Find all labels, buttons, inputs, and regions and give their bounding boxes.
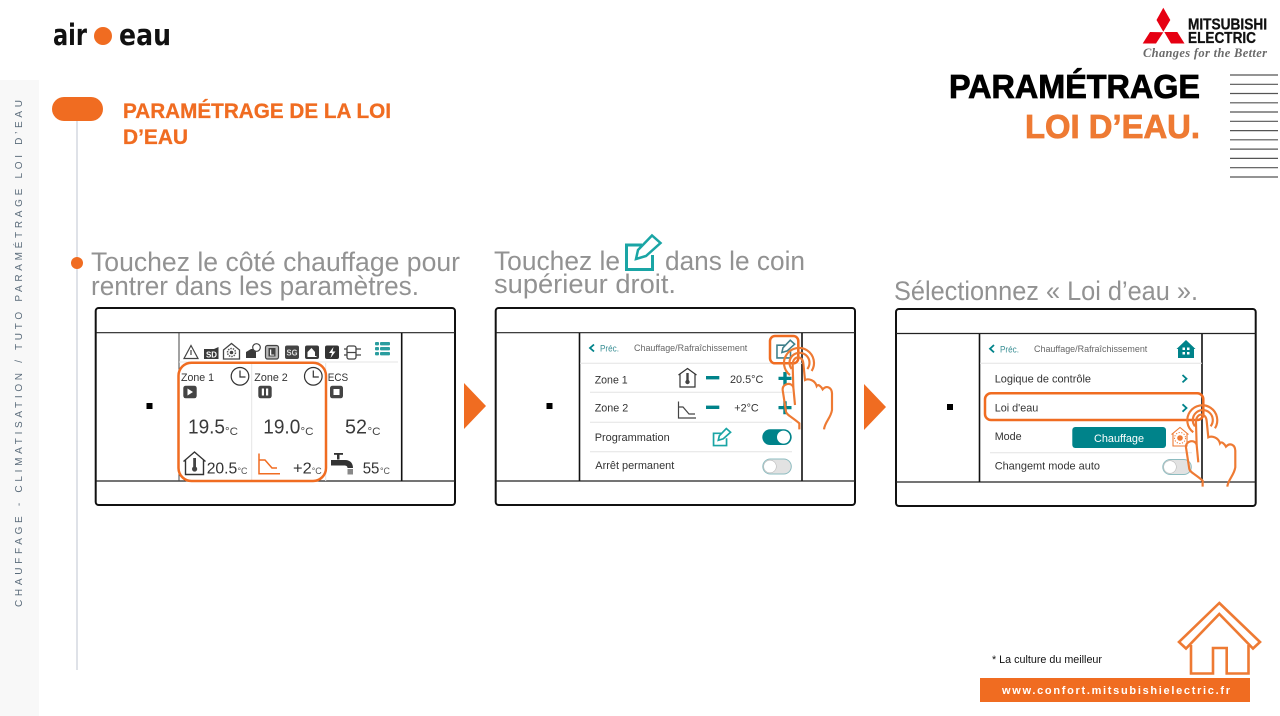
zone 2 column: 19.0 (263, 416, 300, 438)
zone 1 column: Zone 1 (181, 372, 214, 384)
row: loi d'eau: Loi d'eau (995, 403, 1038, 415)
logo: Mitsubishi Electric (1143, 8, 1267, 60)
zone 2 column: °C (300, 426, 314, 438)
status icons: SG (286, 348, 298, 358)
step 2 text: Touchez le (494, 246, 620, 276)
highlight: edit icon (770, 336, 798, 363)
timeline (52, 97, 103, 670)
panel: screen 1 home (96, 308, 455, 505)
icon: touch hand (1186, 405, 1235, 487)
step 2 text (494, 236, 805, 299)
ECS column: 52 (345, 416, 367, 438)
zone 1 column (181, 368, 249, 478)
status icons (184, 344, 361, 360)
row: arret permanent (595, 459, 791, 474)
ECS column: ECS (328, 372, 348, 384)
row: zone 1 (595, 368, 792, 387)
row: arret permanent: Arrêt permanent (595, 460, 674, 472)
header: Chauffage/Rafraîchissement (1034, 344, 1148, 355)
row: logique de controle: Logique de contrôle (995, 374, 1091, 386)
icon: edit (777, 340, 795, 358)
ECS column (328, 372, 390, 478)
section heading: D’EAU (123, 126, 188, 149)
row: mode: Mode (995, 431, 1022, 443)
header: Préc. (1000, 344, 1019, 354)
panel: screen 2 heating (496, 308, 855, 505)
row: logique de controle (995, 374, 1186, 386)
footnote: * La culture du meilleur (992, 654, 1102, 666)
zone 2 column (254, 368, 322, 478)
section heading (123, 100, 391, 149)
zone 2 column: +2 (293, 460, 312, 478)
zone 1 column: °C (238, 466, 248, 476)
zone 1 column: 20.5 (207, 460, 237, 478)
row: mode (995, 427, 1188, 448)
row: changement mode auto: Changemt mode auto (995, 460, 1100, 472)
sidebar (0, 80, 39, 716)
logo: Mitsubishi Electric: MITSUBISHI (1188, 17, 1267, 34)
row: changement mode auto (995, 460, 1191, 474)
row: zone 1: 20.5°C (730, 374, 763, 386)
header (990, 344, 1148, 355)
logo: air eau: eau (119, 18, 171, 52)
row: loi d'eau (995, 403, 1186, 415)
status icons: L (270, 348, 274, 358)
logo: air eau: air (53, 18, 88, 52)
row: zone 2: +2°C (734, 403, 759, 415)
footer url bar (980, 678, 1250, 702)
header: Chauffage/Rafraîchissement (634, 343, 748, 354)
row: zone 1: Zone 1 (595, 374, 628, 386)
icon: home (1176, 340, 1196, 358)
ECS column: °C (380, 466, 390, 476)
header: Préc. (600, 344, 619, 354)
title: PARAMÉTRAGE (949, 68, 1200, 105)
panel: screen 3 settings (896, 309, 1256, 506)
step 1 text: Touchez le côté chauffage pour (91, 247, 460, 277)
icon: touch hand (783, 348, 832, 429)
row: programmation (595, 429, 792, 446)
zone 1 column: °C (225, 426, 238, 438)
step 2 text: supérieur droit. (494, 269, 676, 299)
highlight: zones (178, 363, 326, 481)
sidebar: CHAUFFAGE - CLIMATISATION / TUTO PARAMÉTRAGE LOI D’EAU (12, 100, 25, 607)
logo: Mitsubishi Electric: ELECTRIC (1188, 30, 1256, 47)
row: programmation: Programmation (595, 432, 670, 444)
zone 2 column: Zone 2 (254, 372, 288, 384)
row: zone 2 (595, 401, 792, 418)
zone 2 column: °C (312, 466, 322, 476)
logo: air eau (53, 18, 171, 52)
footer url bar: www.confort.mitsubishielectric.fr (1001, 685, 1231, 697)
logo: Mitsubishi Electric: Changes for the Better (1143, 46, 1267, 60)
step 1 text: rentrer dans les paramètres. (91, 271, 419, 301)
header (590, 343, 748, 354)
ECS column: 55 (363, 460, 379, 478)
step 2 text: dans le coin (665, 246, 805, 276)
ECS column: °C (368, 426, 381, 438)
menu icon (375, 342, 390, 355)
status icons: SD (206, 350, 217, 360)
arrow 2 (864, 384, 886, 430)
step 3 text: Sélectionnez « Loi d’eau ». (894, 276, 1198, 306)
zone 1 column: 19.5 (188, 416, 225, 438)
title: LOI D’EAU. (1025, 108, 1200, 145)
highlight: loi d'eau row (985, 393, 1203, 420)
row: zone 2: Zone 2 (595, 403, 628, 415)
title (949, 68, 1200, 145)
icon: house (1179, 603, 1260, 674)
arrow 1 (464, 383, 486, 429)
step 1 text (91, 247, 460, 301)
row: mode: Chauffage (1094, 433, 1144, 445)
section heading: PARAMÉTRAGE DE LA LOI (123, 100, 391, 123)
